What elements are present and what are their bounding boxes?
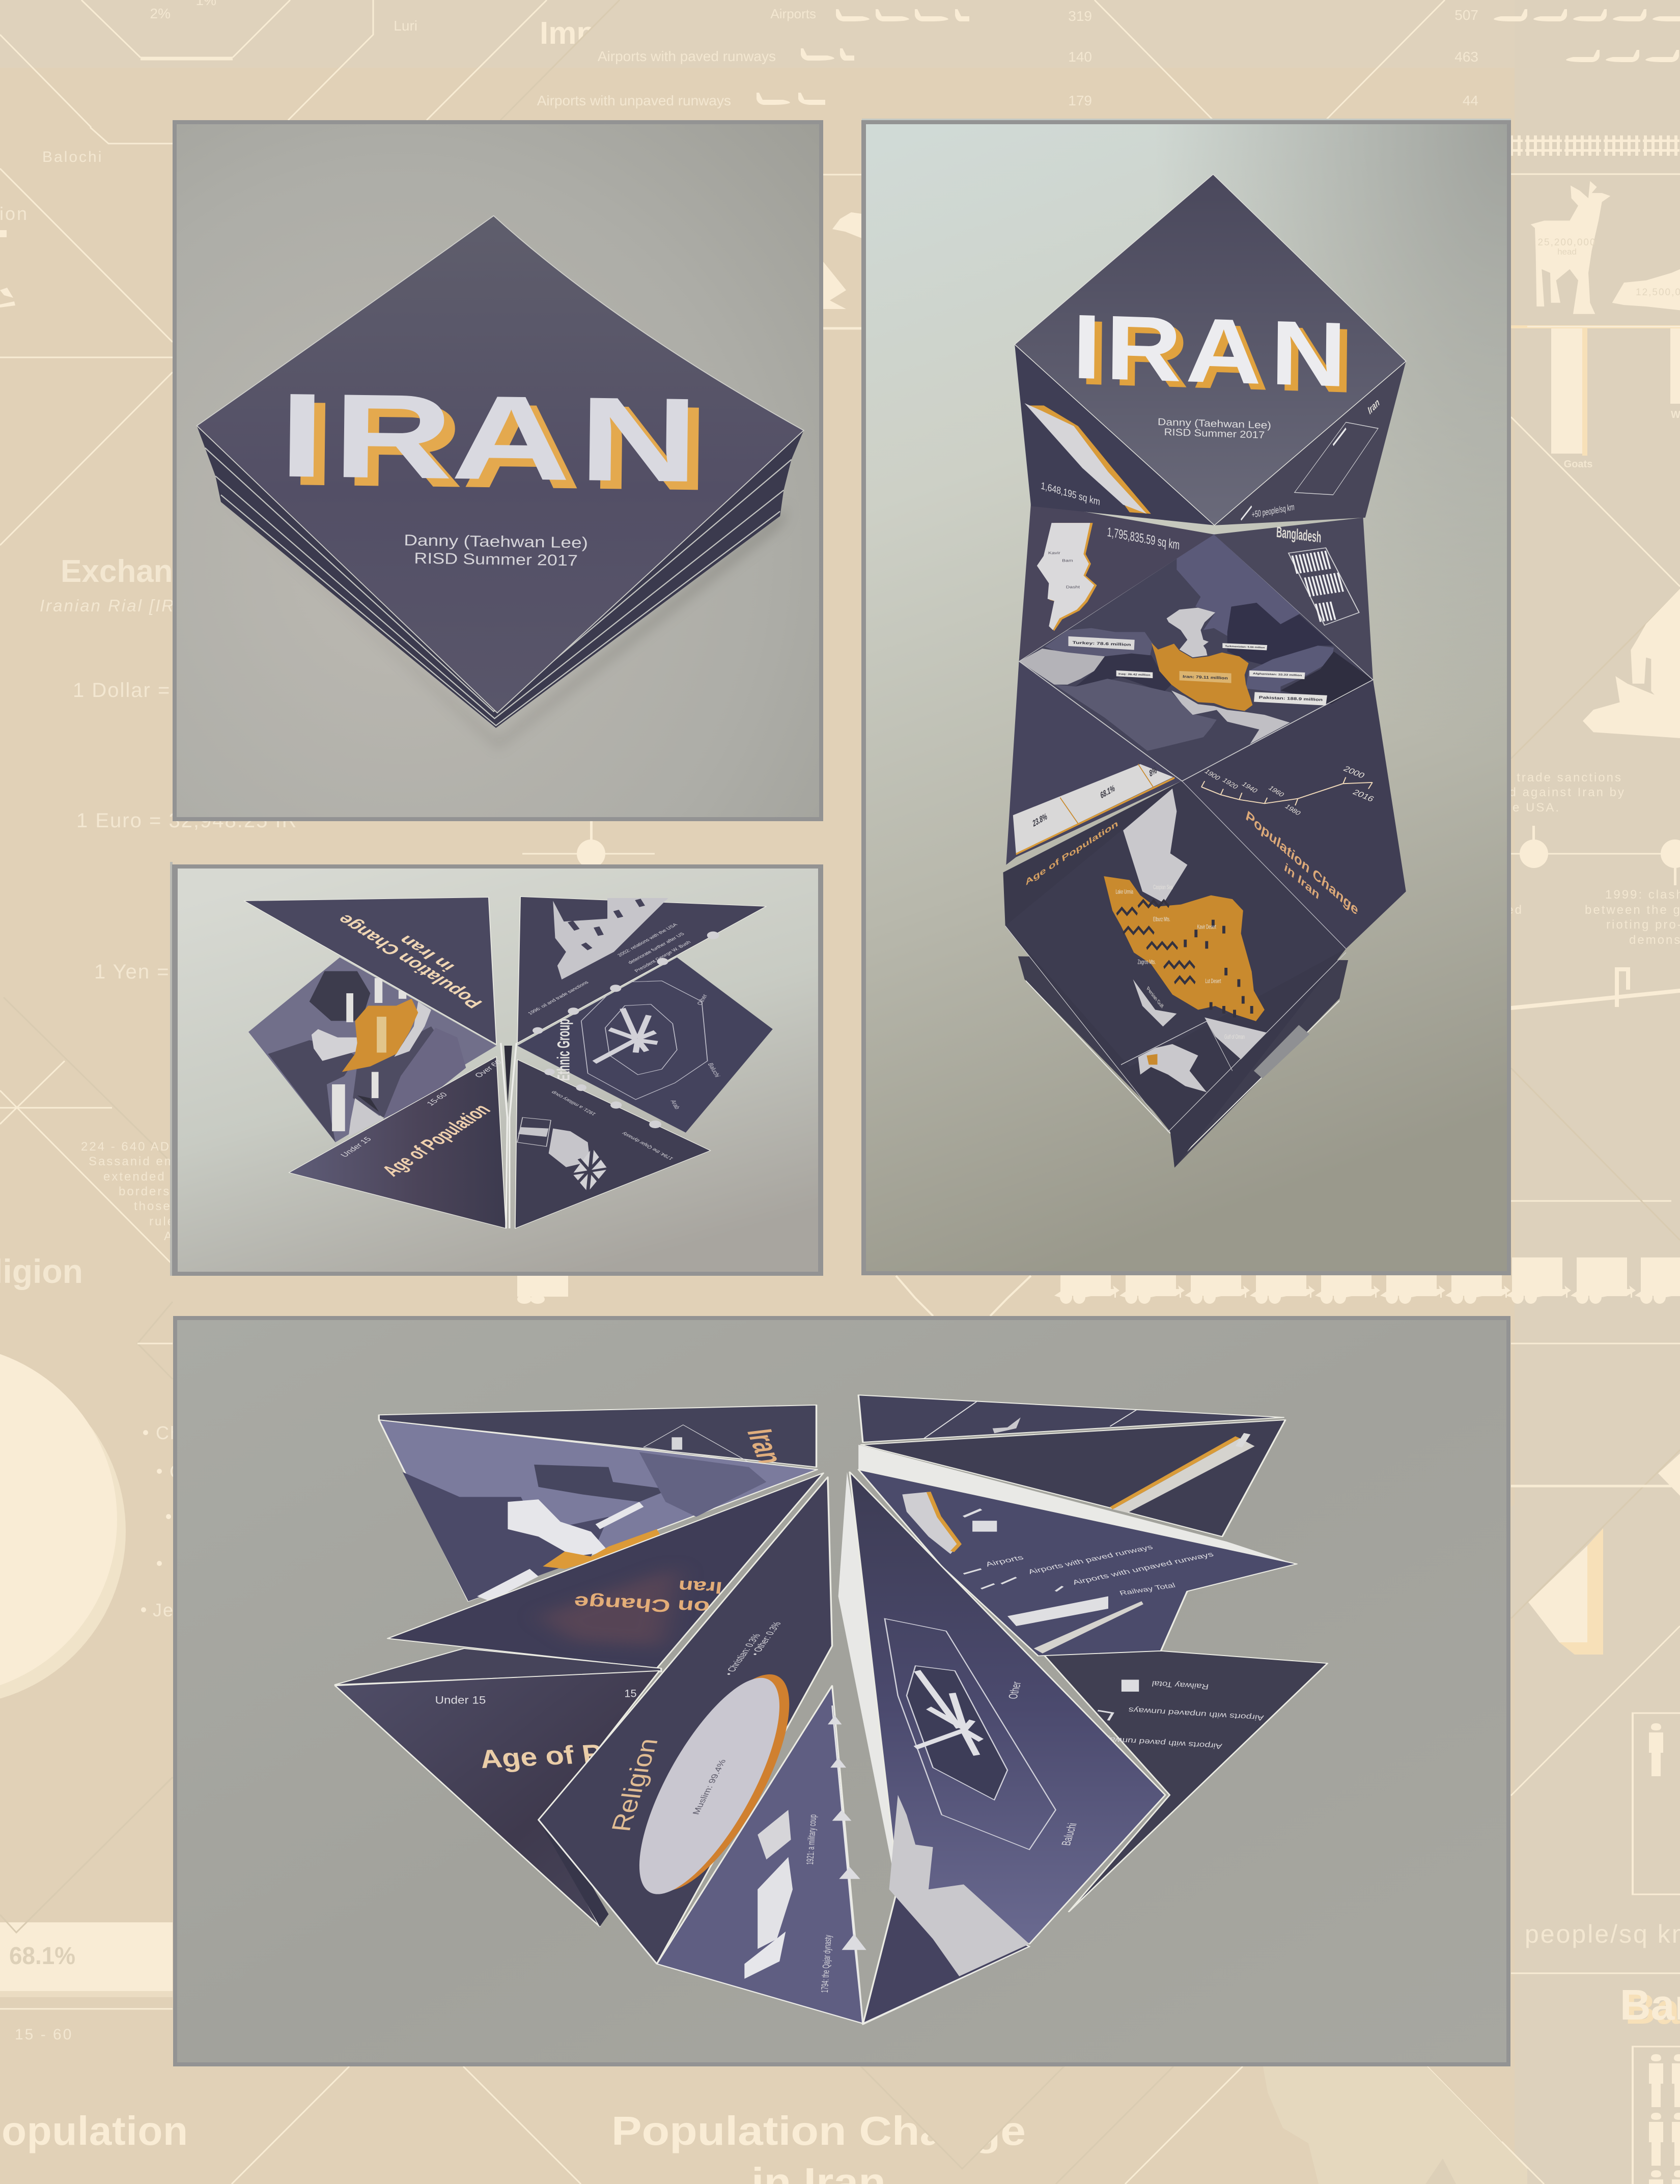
timeline flap with building silhouette: deteriorate further after US bbox=[627, 932, 686, 965]
land area flap bbox=[1015, 345, 1214, 525]
airports flap bbox=[858, 1470, 1297, 1656]
background: top labels: 44 bbox=[1463, 93, 1478, 108]
tower author credit bbox=[1158, 417, 1271, 441]
area map flap bbox=[1019, 502, 1214, 661]
population line chart: 1960 bbox=[1267, 785, 1286, 798]
map labels: Elburz Mts. bbox=[1153, 916, 1170, 923]
white centre strip bbox=[838, 1472, 900, 1887]
author credit: RISD Summer 2017 bbox=[414, 550, 578, 569]
background: left labels: 224 - 640 AD: bbox=[81, 1140, 176, 1154]
author credit bbox=[404, 532, 588, 569]
lower right flap: Airports with unpaved runways bbox=[1128, 1706, 1265, 1722]
background: age bar: 68.1% bbox=[9, 1943, 75, 1970]
religion flap: • Other: 0.3% bbox=[749, 1621, 783, 1657]
tower author credit: Danny (Taehwan Lee) bbox=[1158, 417, 1271, 431]
ethnic octagon flap bbox=[850, 1472, 1165, 1944]
background: plane icons bbox=[757, 9, 1680, 105]
background: left labels: 1 Dollar = 32,000 IR bbox=[73, 679, 275, 702]
map flap bbox=[248, 958, 496, 1142]
age of population flap: Under 15 bbox=[435, 1694, 486, 1706]
background: railway bbox=[1511, 135, 1680, 156]
airports flap: Railway Total bbox=[1118, 1582, 1177, 1597]
population line chart: 1900 bbox=[1203, 768, 1222, 781]
age flap top fold bbox=[335, 1648, 661, 1685]
age of population flap bbox=[289, 1057, 506, 1228]
ethnic group labels: Baluchi bbox=[706, 1062, 721, 1078]
back flap: iran density bbox=[379, 1405, 817, 1467]
age of population flap: Under 15 bbox=[339, 1136, 374, 1159]
background: left labels: Hindu bbox=[172, 1553, 225, 1574]
background: timeline markers bbox=[577, 821, 1680, 1010]
background: cream triangle chart bbox=[1511, 1405, 1680, 1655]
panel: stacked booklet cover photo bbox=[173, 120, 823, 821]
background: goat and wheat chart: Goats bbox=[1564, 459, 1592, 470]
back flap: iran density: Iran bbox=[740, 1427, 791, 1466]
age of population title: Age of Population bbox=[1024, 819, 1119, 887]
flag and timeline flap: 1794: the Qajar dynasty bbox=[820, 1935, 834, 1993]
lower map flap bbox=[1003, 781, 1346, 1168]
lower right flap bbox=[1043, 1651, 1327, 1912]
asia inset bbox=[1138, 1044, 1207, 1092]
timeline flap with building silhouette: President George W. Bush bbox=[634, 940, 692, 973]
population change flap: Population Change bbox=[332, 912, 487, 1011]
background: gap shapes bbox=[517, 212, 862, 1304]
ethnic group labels: Other bbox=[696, 994, 709, 1006]
airports flap: Airports with paved runways bbox=[1026, 1543, 1154, 1576]
religion flap bbox=[539, 1477, 832, 1964]
ethnic group labels bbox=[669, 994, 721, 1110]
ethnic group octagon flap bbox=[517, 958, 773, 1133]
background: top labels: Airports with paved runways bbox=[598, 48, 776, 64]
background: bottom headings bbox=[0, 2066, 1527, 2184]
age bar flap: 68.1% bbox=[1100, 783, 1115, 801]
iran in orange bbox=[342, 999, 418, 1072]
area map flap: Bam bbox=[1062, 558, 1073, 563]
population line chart bbox=[1201, 764, 1376, 817]
persian gulf and arabian coast bbox=[1171, 690, 1290, 744]
background: left labels: Jews bbox=[153, 1600, 199, 1620]
age of population flap: Age of Population bbox=[377, 1101, 495, 1180]
religion flap: • Christian: 0.3% bbox=[722, 1633, 763, 1676]
background: right timeline text bbox=[1461, 771, 1680, 947]
country labels: Turkmenistan: 5.66 million bbox=[1225, 645, 1265, 649]
background: goat and wheat chart: 25,200,000 bbox=[1537, 237, 1597, 248]
background: top labels: 2% bbox=[150, 6, 171, 21]
map labels bbox=[1115, 884, 1245, 1041]
timeline flap with building silhouette: 2002: relations with the USA bbox=[617, 922, 679, 958]
background: age bar bbox=[0, 1777, 173, 1997]
panel: fanned-out booklet photo bbox=[173, 1316, 1510, 2066]
population change flap bbox=[244, 897, 496, 1044]
country labels: Turkey: 78.6 million bbox=[1072, 640, 1131, 647]
background: left labels: 1 Yen = 280 IR bbox=[94, 961, 243, 983]
map labels: Lut Desert bbox=[1205, 978, 1221, 985]
lower right flap: Railway Total bbox=[1151, 1679, 1210, 1691]
background: left labels: Iranian Rial [IR] bbox=[40, 596, 181, 615]
land area flap: 1,648,195 sq km bbox=[1041, 481, 1101, 508]
population line chart: 1940 bbox=[1240, 781, 1259, 794]
population change flap bbox=[1182, 680, 1406, 949]
country labels: Afghanistan: 33.33 million bbox=[1253, 673, 1302, 677]
airports flap: Airports with unpaved runways bbox=[1071, 1551, 1215, 1586]
top right flap bbox=[858, 1395, 1283, 1442]
country labels bbox=[332, 978, 406, 1131]
background: top labels bbox=[150, 0, 1478, 108]
background: right timeline text: ed bbox=[1506, 903, 1523, 917]
age of population flap: 15-60 bbox=[425, 1091, 450, 1107]
flag and timeline flap bbox=[657, 1686, 866, 2024]
background: top labels: Airports bbox=[770, 6, 816, 21]
population change title bbox=[1244, 807, 1360, 918]
background: right timeline text: the USA. bbox=[1499, 801, 1560, 815]
white fold strip bbox=[858, 1445, 1295, 1564]
population change flap: in Iran bbox=[394, 933, 459, 974]
background: left labels: Other bbox=[178, 1506, 229, 1527]
background: top labels: 140 bbox=[1068, 49, 1092, 65]
background: left labels: Exchange Rate bbox=[61, 554, 287, 589]
bottom map flap bbox=[863, 1795, 1029, 2025]
map labels: Gulf of Oman bbox=[1224, 1034, 1245, 1041]
area map flap: Kavir bbox=[1048, 551, 1060, 555]
map labels: Zagros Mts. bbox=[1138, 959, 1156, 966]
airports flap: Airports bbox=[984, 1554, 1025, 1568]
background: right timeline text: imposed against Iran by bbox=[1461, 786, 1626, 799]
iran map in orange bbox=[1104, 876, 1265, 1021]
background: left labels: borders bbox=[119, 1185, 171, 1198]
country labels: Iran: 79.11 million bbox=[1183, 675, 1228, 680]
density flap bbox=[1214, 518, 1373, 680]
background: left labels: Sassanid empire bbox=[89, 1155, 203, 1168]
flap edge outline bbox=[539, 1820, 1029, 2024]
country labels: Pakistan: 188.9 million bbox=[1258, 695, 1323, 702]
population line chart: 1980 bbox=[1283, 803, 1303, 817]
ethnic group labels: Arab bbox=[669, 1100, 681, 1110]
title: IRAN bbox=[278, 368, 699, 507]
background: left labels: extended far bbox=[103, 1170, 189, 1184]
booklet top cover diamond bbox=[197, 216, 804, 713]
background: top labels: 179 bbox=[1068, 93, 1092, 108]
timeline flap with building silhouette bbox=[517, 897, 766, 1081]
tower cover diamond bbox=[1015, 174, 1406, 525]
background: right map silhouette bbox=[1583, 589, 1680, 738]
background: left labels: Christian bbox=[156, 1422, 237, 1443]
background: bottom headings: Population Change bbox=[611, 2108, 1026, 2153]
booklet page stack bbox=[197, 426, 804, 728]
iran density flap: +50 people/sq km bbox=[1251, 502, 1295, 520]
central fold bbox=[501, 1043, 516, 1228]
population change flap bbox=[387, 1473, 823, 1668]
population line chart: 2000 bbox=[1341, 764, 1367, 780]
ethnic octagon flap: Other bbox=[1006, 1681, 1024, 1699]
tower title: IRAN bbox=[1072, 295, 1347, 406]
title shadow: IRAN bbox=[289, 377, 710, 516]
density flap: Bangladesh bbox=[1276, 524, 1322, 546]
ethnic spokes bbox=[594, 1009, 657, 1062]
timeline flap with building silhouette: Ethnic Group bbox=[554, 1019, 574, 1081]
panel: unfolded booklet tower photo bbox=[861, 119, 1511, 1275]
background: top labels: 507 bbox=[1454, 7, 1478, 23]
age of population flap: Over 60 bbox=[473, 1059, 504, 1079]
background: heading fragment: Improvements bbox=[540, 16, 755, 51]
background: density boxes bbox=[1525, 1713, 1680, 2184]
age of population flap: Age of Population bbox=[478, 1732, 740, 1774]
map labels: Lake Urmia bbox=[1115, 889, 1133, 895]
iran in orange bbox=[1152, 642, 1252, 711]
background: religion circle bbox=[0, 1344, 171, 1705]
population change title: Population Change bbox=[1244, 807, 1360, 918]
neighbouring countries map bbox=[1019, 534, 1373, 781]
background: goat and wheat chart bbox=[1511, 181, 1680, 470]
background: left labels: 15 - 60 bbox=[15, 2026, 73, 2043]
background: goat and wheat chart: head bbox=[1557, 247, 1577, 257]
background: train bbox=[1054, 1257, 1680, 1304]
religion pie bbox=[618, 1667, 818, 1898]
age of population flap bbox=[335, 1671, 740, 1926]
bar chart flap bbox=[861, 1420, 1285, 1536]
map labels: Persian Gulf bbox=[1146, 985, 1164, 1011]
background: right timeline text: and trade sanctions bbox=[1487, 771, 1622, 785]
country labels bbox=[1069, 636, 1327, 706]
background: left labels: 1 Euro = 32,948.25 IR bbox=[76, 809, 297, 832]
age bar flap bbox=[1006, 661, 1182, 887]
religion flap: Muslim: 99.4% bbox=[690, 1759, 727, 1815]
age bar flap: 8% bbox=[1149, 766, 1158, 779]
tower author credit: RISD Summer 2017 bbox=[1164, 427, 1265, 441]
caspian sea bbox=[1166, 608, 1215, 657]
background: left labels: Balochi bbox=[42, 149, 103, 165]
background: top labels: 463 bbox=[1454, 49, 1478, 65]
lower right flap: Airports with paved runways bbox=[1099, 1735, 1223, 1750]
background: left labels: A bbox=[164, 1229, 174, 1243]
population line chart: 1920 bbox=[1221, 777, 1240, 790]
ethnic octagon flap: Baluchi bbox=[1059, 1823, 1080, 1846]
map labels: Kavir Desert bbox=[1197, 924, 1216, 931]
background: left labels bbox=[0, 149, 297, 2043]
background: top labels: Luri bbox=[394, 18, 417, 34]
background: top labels: Airports with unpaved runways bbox=[537, 93, 731, 108]
panel: opened booklet top view photo bbox=[170, 862, 823, 1276]
background: left labels: those bbox=[134, 1199, 172, 1213]
population line chart: 2016 bbox=[1351, 788, 1376, 803]
flag and timeline flap: 1921: a military coup bbox=[805, 1814, 819, 1865]
population change flap: on Change bbox=[573, 1592, 711, 1618]
map labels: Caspian Sea bbox=[1153, 884, 1173, 891]
age bar flap: 23.8% bbox=[1032, 811, 1048, 829]
background: left labels: rule bbox=[149, 1215, 176, 1228]
back flap: neighbours map bbox=[379, 1420, 817, 1601]
background: left labels: Catholic bbox=[170, 1461, 244, 1482]
area map flap: Dasht bbox=[1066, 585, 1080, 589]
population change flap: Iran bbox=[677, 1577, 723, 1597]
population change title: in Iran bbox=[1283, 860, 1321, 902]
iran density flap bbox=[1214, 361, 1406, 525]
age of population flap: 15 bbox=[624, 1687, 637, 1699]
iran density flap: Iran bbox=[1366, 395, 1381, 417]
flag and timeline flap: 1921: a military coup bbox=[550, 1090, 597, 1116]
caspian sea and gulf bbox=[1123, 789, 1267, 1059]
author credit: Danny (Taehwan Lee) bbox=[404, 532, 588, 552]
country labels: Iraq: 36.42 million bbox=[1118, 673, 1151, 677]
tower title shadow: IRAN bbox=[1079, 301, 1355, 412]
lower booklet stack bbox=[1018, 957, 1348, 1168]
timeline flap with building silhouette: 1996: oil and trade sanctions bbox=[527, 981, 590, 1016]
religion title: Religion bbox=[606, 1737, 663, 1833]
northern neighbour regions bbox=[1177, 535, 1302, 636]
flag and timeline flap bbox=[515, 1059, 711, 1228]
area map flap: 1,795,835.59 sq km bbox=[1107, 525, 1180, 553]
background: top labels: 319 bbox=[1068, 8, 1092, 24]
flag and timeline flap: 1794: the Qajar dynasty bbox=[621, 1131, 675, 1161]
